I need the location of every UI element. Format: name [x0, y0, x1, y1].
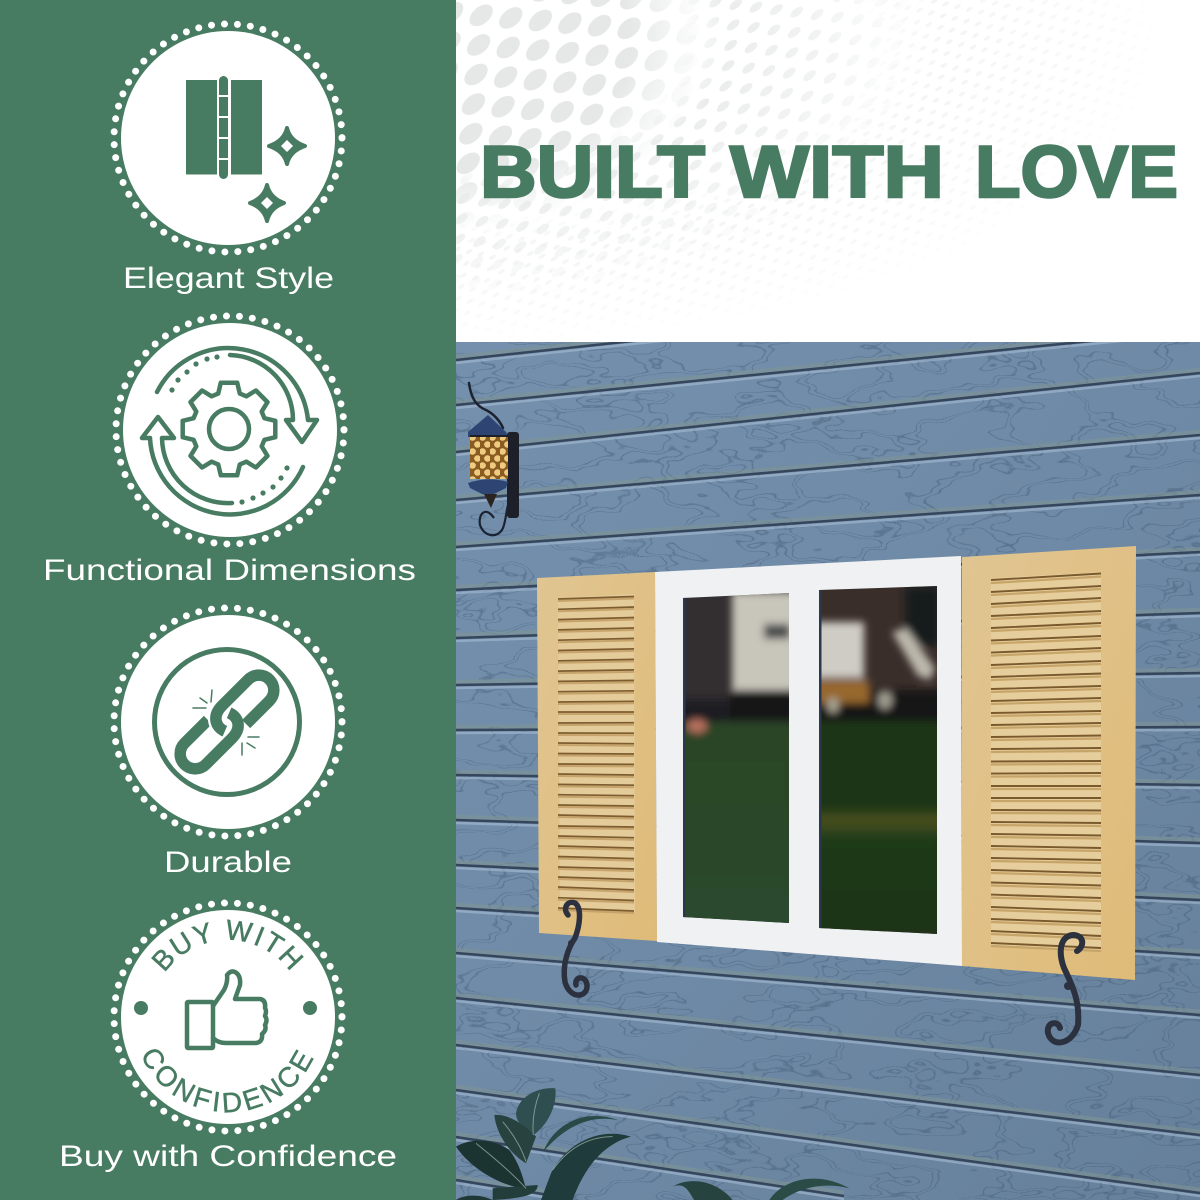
badge: dotted ring [116, 316, 344, 544]
badge: white disc [121, 615, 335, 829]
icon: dotted arc bottom [239, 465, 290, 505]
window pane: right [819, 586, 937, 934]
title: BUILT [480, 132, 705, 213]
label: Functional Dimensions: Functional Dimensions [43, 554, 416, 587]
badge: dotted ring [114, 903, 342, 1131]
icon: chain links [174, 669, 280, 775]
badge: dotted ring [114, 24, 342, 252]
icon: small sparkle [250, 185, 284, 221]
label: Durable: Durable [164, 846, 292, 879]
feature: Functional Dimensions [43, 316, 416, 587]
icon: clockwise arrow top [157, 348, 317, 442]
badge: dotted ring [114, 608, 342, 836]
plant foliage [456, 1088, 849, 1200]
badge: white disc [121, 910, 335, 1124]
badge: white disc [123, 323, 337, 537]
title: WITH [730, 132, 944, 213]
badge: white disc [121, 31, 335, 245]
right shutter [962, 546, 1136, 980]
icon: thumbs up [187, 971, 266, 1048]
left shutter [537, 572, 657, 941]
seal text: CONFIDENCE: CONFIDENCE [144, 1049, 314, 1113]
shutter dog: right [1048, 935, 1082, 1042]
window pane: left [683, 593, 789, 923]
panel: green sidebar [0, 0, 456, 1200]
seal: side dots [134, 1001, 317, 1015]
feature: Durable [114, 608, 342, 879]
title: LOVE [975, 132, 1178, 213]
label: Buy with Confidence: Buy with Confidence [59, 1140, 397, 1173]
window frame [655, 556, 962, 966]
icon: gear [183, 383, 275, 475]
wall siding [456, 277, 1200, 1200]
icon: shutter panels with hinge [186, 76, 262, 179]
icon: break sparks [193, 690, 259, 755]
panel: halftone header [456, 0, 1038, 294]
label: Elegant Style: Elegant Style [123, 262, 334, 295]
icon: clockwise arrow bottom [142, 417, 303, 514]
feature: Elegant Style [114, 24, 342, 295]
shutter dog: left [564, 902, 587, 995]
seal text: BUY WITH: BUY WITH [151, 919, 304, 972]
icon: large sparkle [269, 128, 305, 164]
wall lantern [468, 383, 519, 535]
icon: dotted arc top [169, 354, 220, 393]
feature: Buy with Confidence [59, 900, 397, 1173]
icon: inner ring [154, 650, 300, 794]
title [480, 132, 1178, 213]
photo: house wall with shuttered window [456, 277, 1200, 1200]
